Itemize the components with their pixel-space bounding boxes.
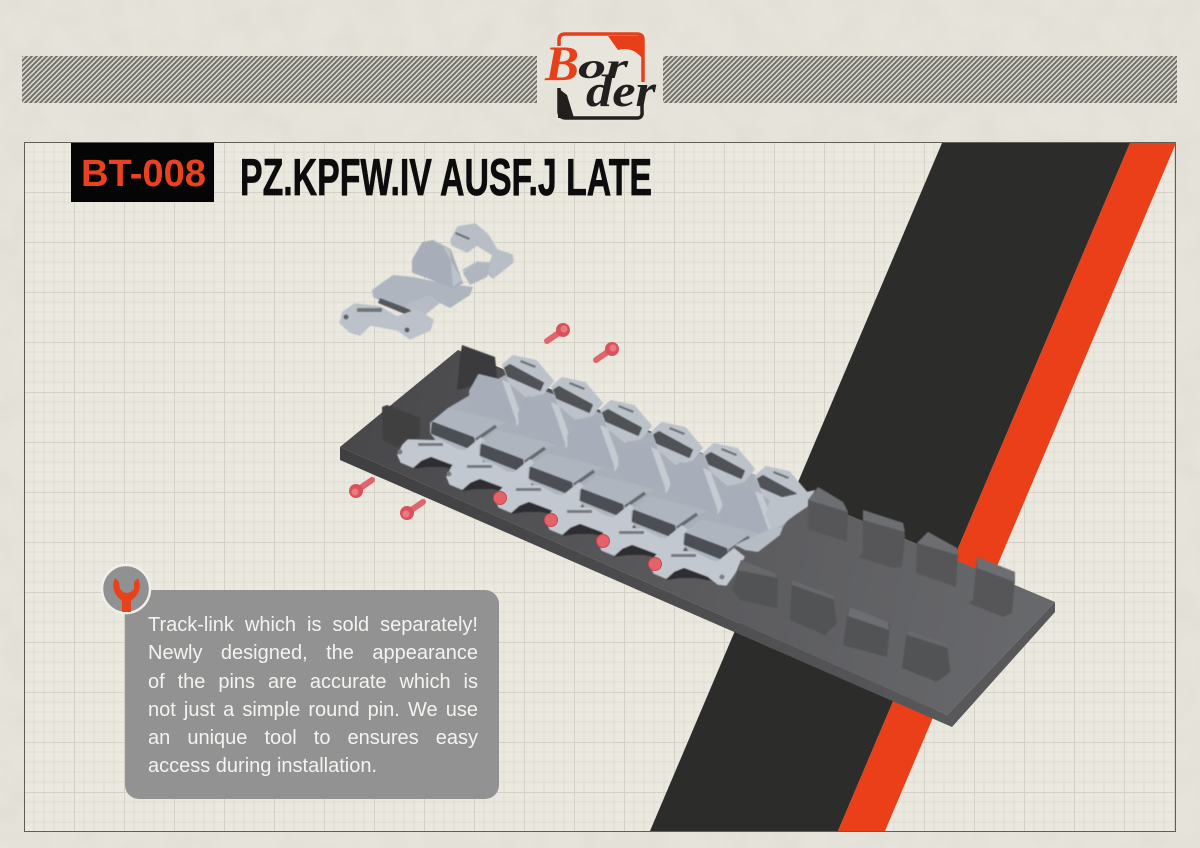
callout text: access during installation. bbox=[148, 755, 377, 777]
plate tabs, left bbox=[382, 345, 497, 447]
plate teeth: back row bbox=[808, 487, 1015, 617]
loose pin: lower left bbox=[349, 480, 372, 498]
callout text bbox=[148, 614, 478, 777]
logo: Border: B bbox=[544, 35, 579, 91]
callout text: not just a simple round pin. We use bbox=[148, 699, 478, 721]
red pin heads bbox=[494, 492, 662, 570]
loose pin: upper right bbox=[596, 342, 619, 360]
icon: wrench bbox=[102, 565, 150, 613]
logo: Border: or bbox=[578, 46, 630, 86]
title: PZ.KPFW.IV AUSF.J LATE bbox=[240, 149, 652, 207]
callout text: an unique tool to ensures easy bbox=[148, 727, 478, 749]
plate teeth: front row bbox=[732, 560, 950, 682]
track plate bbox=[340, 350, 1055, 727]
callout text: Newly designed, the appearance bbox=[148, 642, 478, 664]
callout text: of the pins are accurate which is bbox=[148, 671, 478, 693]
diagonal band: orange-red bbox=[838, 143, 1176, 831]
framed grid panel bbox=[24, 142, 1176, 832]
diagonal band: dark bbox=[650, 143, 1130, 831]
separate track link bbox=[340, 224, 513, 339]
callout text: Track-link which is sold separately! bbox=[148, 614, 478, 636]
assembled track links bbox=[398, 356, 815, 585]
callout panel bbox=[125, 590, 499, 799]
loose pin: lower right bbox=[400, 502, 423, 520]
logo: Border: der bbox=[586, 65, 657, 116]
hatched header bar left bbox=[22, 56, 537, 103]
badge: BT-008: BT-008 bbox=[81, 153, 206, 195]
logo: Border bbox=[544, 30, 657, 122]
hatched header bar right bbox=[663, 56, 1177, 103]
badge: BT-008 bbox=[71, 143, 214, 202]
loose pin: upper left bbox=[547, 323, 570, 341]
